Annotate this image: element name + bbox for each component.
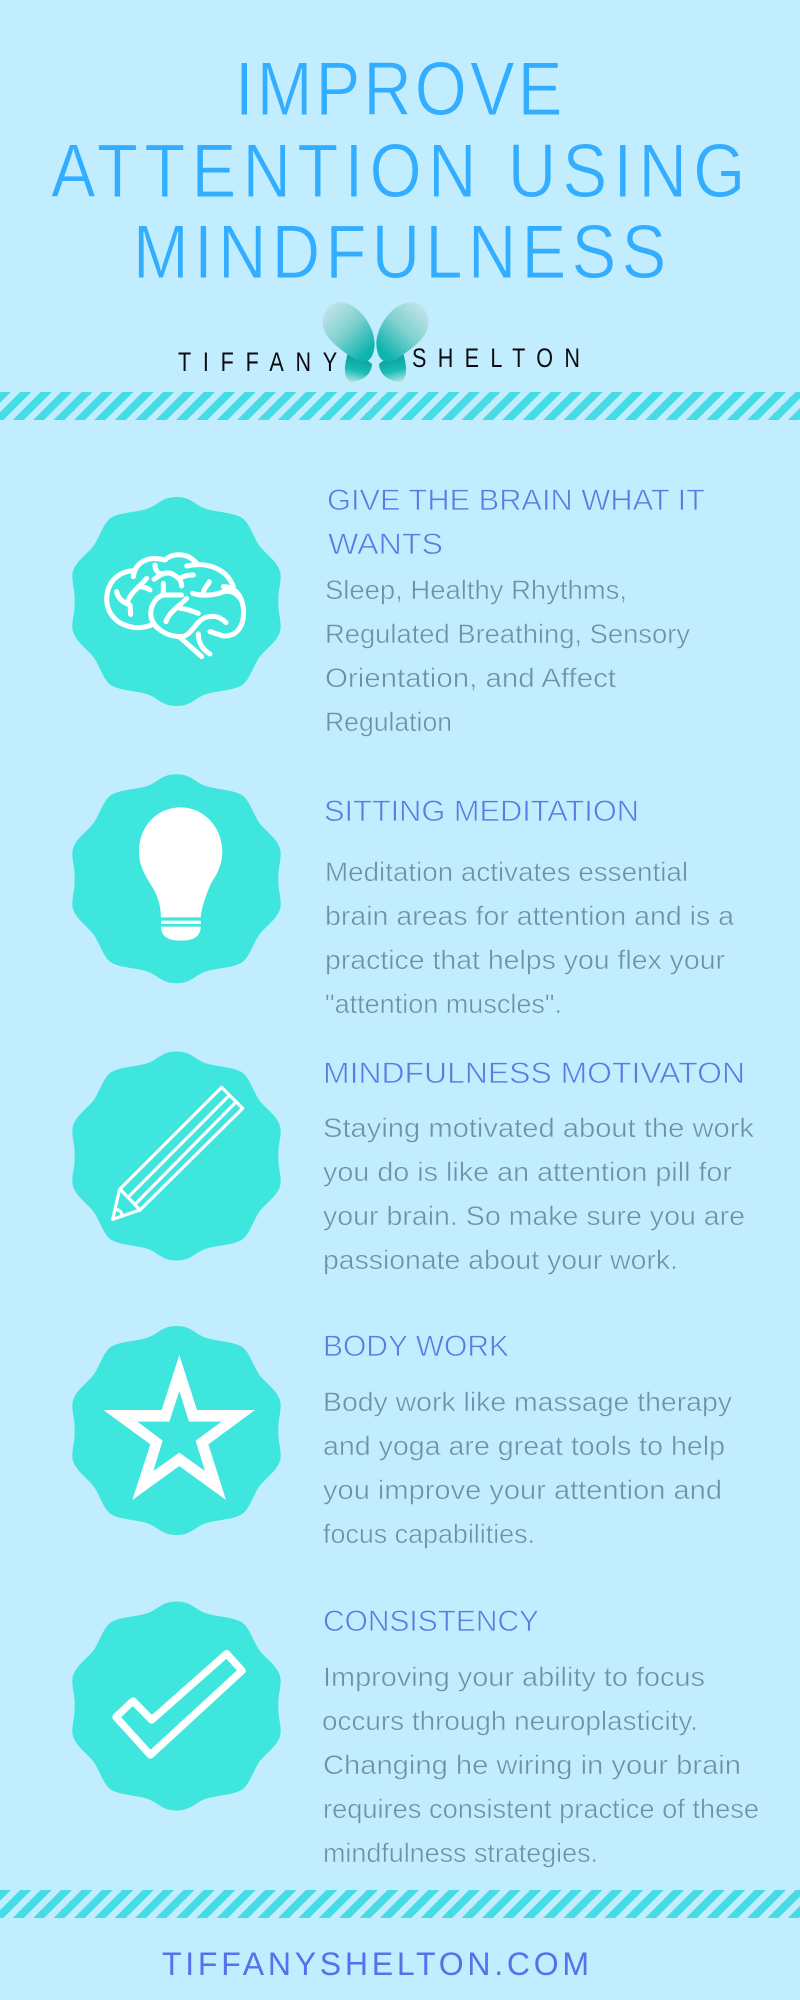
panel: give the brain what it wants [72, 484, 705, 737]
body text: requires consistent practice of these [323, 1794, 759, 1824]
striped divider: bottom [0, 1890, 800, 1918]
title: IMPROVE [235, 47, 562, 132]
body text: Changing he wiring in your brain [323, 1750, 741, 1780]
body text: occurs through neuroplasticity. [322, 1706, 698, 1736]
icon badge: star [72, 1326, 281, 1535]
icon badge: pencil [72, 1052, 281, 1260]
heading: BODY WORK [323, 1330, 509, 1363]
striped divider: top [0, 392, 800, 420]
icon: butterfly [323, 302, 428, 382]
body text: brain areas for attention and is a [325, 901, 735, 931]
body text: Body work like massage therapy [323, 1387, 733, 1417]
body text: Regulated Breathing, Sensory [325, 619, 691, 649]
icon badge: brain [72, 497, 281, 706]
footer website: TIFFANYSHELTON.COM [162, 1946, 589, 1982]
body text: focus capabilities. [323, 1519, 535, 1549]
heading: GIVE THE BRAIN WHAT IT [327, 484, 705, 517]
body text [325, 575, 691, 737]
heading: WANTS [328, 528, 443, 561]
body text [325, 857, 735, 1019]
title: ATTENTION USING [51, 129, 745, 214]
body text: you do is like an attention pill for [323, 1157, 732, 1187]
panel: mindfulness motivation [72, 1052, 755, 1275]
body text: Meditation activates essential [325, 857, 688, 887]
body text [322, 1662, 759, 1868]
body text: your brain. So make sure you are [323, 1201, 745, 1231]
heading: SITTING MEDITATION [324, 795, 639, 828]
logo text: Shelton: SHELTON [412, 344, 580, 374]
icon badge: light bulb [72, 774, 281, 983]
panel: body work [72, 1326, 733, 1549]
panel: sitting meditation [72, 774, 735, 1019]
icon badge: check mark [72, 1602, 281, 1810]
body text: Sleep, Healthy Rhythms, [325, 575, 627, 605]
body text: you improve your attention and [323, 1475, 722, 1505]
heading: CONSISTENCY [323, 1605, 539, 1638]
heading: MINDFULNESS MOTIVATON [323, 1057, 745, 1090]
logo text: Tiffany: TIFFANY [178, 348, 337, 378]
body text [323, 1387, 733, 1549]
body text: Regulation [325, 707, 452, 737]
body text: Staying motivated about the work [323, 1113, 755, 1143]
title [51, 47, 745, 295]
body text: and yoga are great tools to help [323, 1431, 725, 1461]
body text: "attention muscles". [325, 989, 562, 1019]
logo: Tiffany Shelton butterfly [178, 302, 580, 382]
body text: Orientation, and Affect [325, 663, 617, 693]
body text [323, 1113, 755, 1275]
body text: passionate about your work. [323, 1245, 678, 1275]
heading [327, 484, 705, 561]
body text: Improving your ability to focus [323, 1662, 705, 1692]
body text: mindfulness strategies. [323, 1838, 598, 1868]
title: MINDFULNESS [133, 210, 666, 295]
panel: consistency [72, 1602, 759, 1868]
body text: practice that helps you flex your [325, 945, 725, 975]
